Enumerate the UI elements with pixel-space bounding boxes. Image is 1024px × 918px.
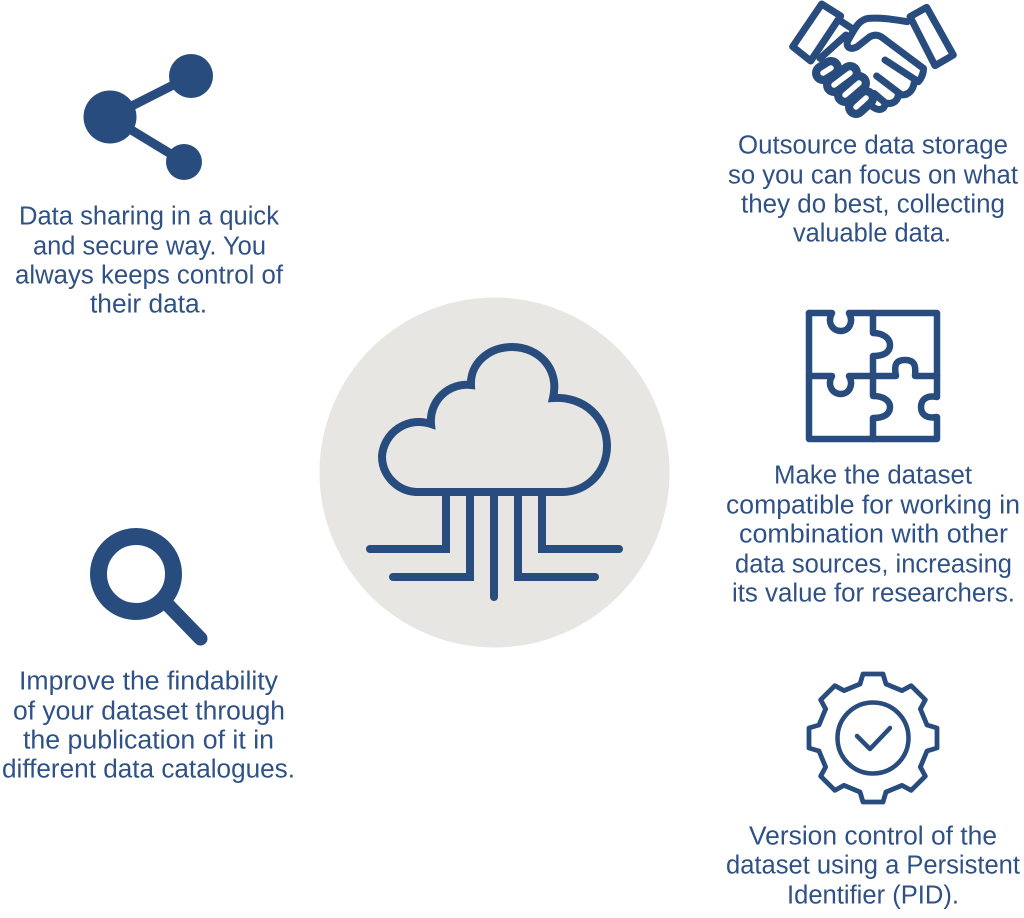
text: version control (726, 823, 1020, 910)
text: findability: different data catalogues. (2, 756, 295, 784)
text: compatibility: combination with other (739, 521, 1009, 549)
text: outsource storage: they do best, collecting (741, 191, 1005, 219)
central circle with cloud (320, 298, 670, 648)
text: data sharing: always keeps control of (15, 262, 284, 290)
icon: cloud with connectors (370, 347, 619, 597)
icon: handshake fingers (823, 68, 866, 107)
right cuff (910, 7, 953, 66)
text: outsource storage (728, 132, 1018, 248)
left cuff (793, 4, 841, 61)
text: data sharing: their data. (90, 291, 207, 319)
hand outline (842, 22, 852, 28)
text: outsource storage: valuable data. (793, 220, 951, 248)
icon: handshake (793, 4, 953, 109)
icon: gear with check (807, 672, 939, 804)
text: version control: Version control of the (749, 823, 997, 851)
text: data sharing (15, 203, 284, 319)
text: version control: dataset using a Persistent (726, 852, 1020, 880)
icon: magnifying glass (98, 536, 200, 638)
icon: share (84, 54, 213, 180)
text: compatibility: Make the dataset (774, 462, 972, 490)
text: findability: of your dataset through (13, 698, 285, 726)
text: data sharing: and secure way. You (33, 233, 266, 261)
background disc (320, 298, 670, 648)
text: findability (2, 668, 295, 784)
icon: puzzle (809, 313, 937, 439)
text: compatibility: data sources, increasing (735, 551, 1012, 579)
text: outsource storage: so you can focus on what (728, 162, 1018, 190)
text: data sharing: Data sharing in a quick (19, 203, 279, 231)
text: version control: Identifier (PID). (787, 882, 959, 910)
text: compatibility: its value for researchers. (732, 580, 1015, 608)
text: compatibility: compatible for working in (726, 492, 1020, 520)
text: findability: the publication of it in (23, 727, 274, 755)
text: findability: Improve the findability (19, 668, 278, 696)
text: compatibility (726, 462, 1020, 608)
text: outsource storage: Outsource data storage (738, 132, 1008, 160)
